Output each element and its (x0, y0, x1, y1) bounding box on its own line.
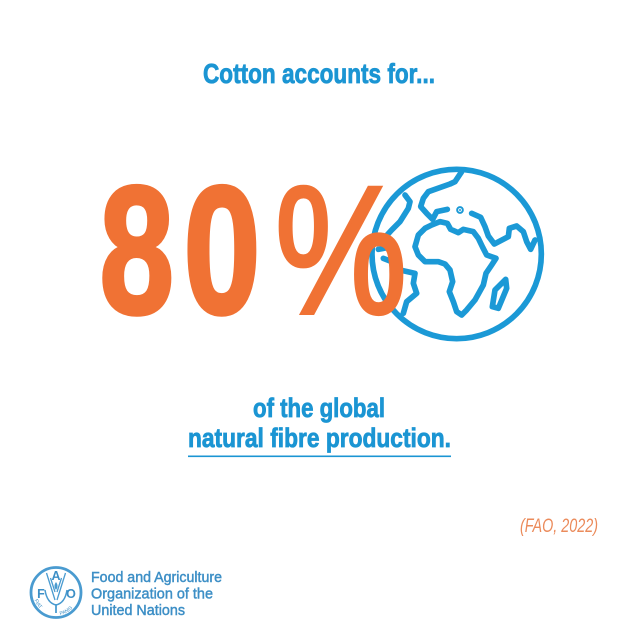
big number: 80%: 8 (100, 148, 174, 352)
title: Cotton accounts for... (203, 58, 435, 89)
organisation name (91, 570, 222, 619)
organisation name: Food and Agriculture (91, 570, 222, 586)
big number: 80%: 0 (184, 148, 260, 352)
closing statement: natural fibre production. (188, 423, 451, 453)
big number: 80% (100, 148, 407, 352)
logo: FAO emblem: O (66, 587, 76, 601)
closing statement (188, 393, 451, 453)
big number: 80%: % (275, 148, 407, 352)
logo: FAO emblem: PANIS (60, 606, 72, 615)
logo: FAO emblem: F (37, 587, 45, 601)
logo: FAO emblem: FIAT (34, 599, 42, 608)
source citation: (FAO, 2022) (520, 516, 598, 537)
organisation name: United Nations (91, 603, 185, 619)
logo: FAO emblem: A (51, 569, 61, 583)
organisation name: Organization of the (91, 586, 213, 602)
logo: FAO emblem (30, 566, 82, 619)
icon: globe (372, 169, 541, 339)
closing statement: of the global (253, 393, 385, 423)
underline (188, 456, 451, 457)
